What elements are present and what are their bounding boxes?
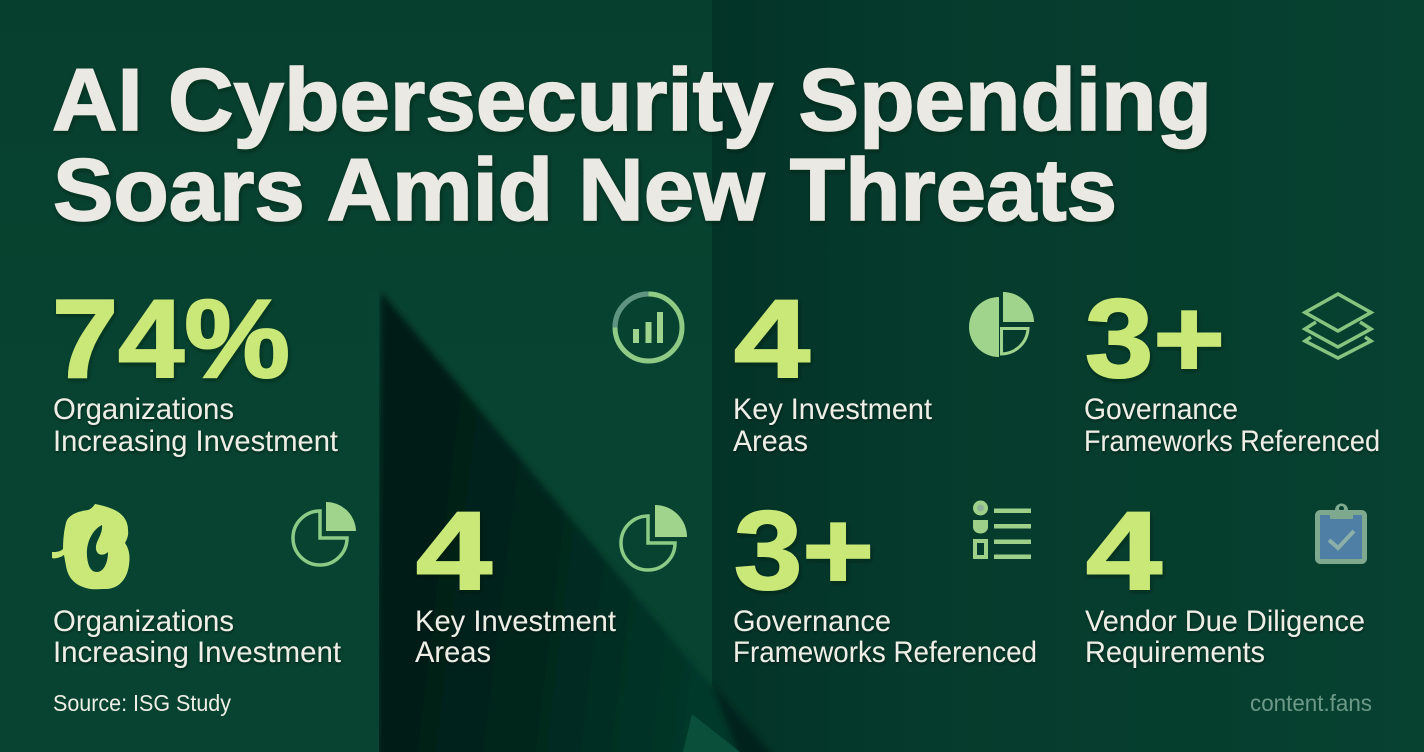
stat: 4 key investment areas: Areas (733, 425, 808, 458)
stat: 3+ governance frameworks referenced: Frameworks Referenced (1084, 425, 1380, 458)
source note: Source: ISG Study (53, 690, 231, 716)
stat: 74% organizations increasing investment (52, 277, 339, 458)
icon: checklist (973, 500, 1031, 559)
stat: 4 key investment areas, row two: Areas (415, 636, 491, 669)
title: Soars Amid New Threats (53, 140, 1117, 239)
stat: 4 vendor due diligence requirements: Vendor Due Diligence (1085, 605, 1365, 638)
stat: 4 key investment areas, row two (415, 489, 617, 669)
stat: garbled figure organizations increasing investment (52, 504, 342, 669)
watermark: content.fans (1250, 690, 1372, 716)
stat: 74% organizations increasing investment: Increasing Investment (53, 425, 339, 458)
stat: garbled figure organizations increasing investment: Organizations (53, 605, 234, 638)
icon: clipboard with check (1318, 504, 1364, 562)
stat: 3+ governance frameworks referenced, row two: 3+ (734, 489, 874, 613)
icon: stacked layers (1305, 294, 1371, 358)
stat: 3+ governance frameworks referenced: 3+ (1085, 277, 1225, 401)
stat: 4 key investment areas: 4 (734, 277, 810, 401)
stat: 4 key investment areas, row two: 4 (416, 489, 492, 613)
icon: pie chart outline 2 (621, 505, 687, 570)
stat: 3+ governance frameworks referenced, row two: Governance (733, 605, 891, 638)
icon: garbled numeral blob (52, 504, 130, 589)
stat: 4 key investment areas: Key Investment (733, 393, 933, 426)
stat: 4 vendor due diligence requirements: Requirements (1085, 636, 1265, 669)
icon: bar chart in ring (615, 294, 682, 361)
title (52, 50, 1212, 239)
stat: 3+ governance frameworks referenced: Governance (1084, 393, 1238, 426)
stat: 3+ governance frameworks referenced, row two: Frameworks Referenced (733, 636, 1037, 669)
stat: 3+ governance frameworks referenced, row two (733, 489, 1037, 669)
stat: 4 vendor due diligence requirements (1085, 489, 1365, 669)
icon: pie chart outline 1 (293, 502, 356, 565)
stat: 4 vendor due diligence requirements: 4 (1086, 489, 1162, 613)
stat: 3+ governance frameworks referenced (1084, 277, 1380, 458)
stat: 4 key investment areas (733, 277, 933, 458)
stat: 74% organizations increasing investment: Organizations (53, 393, 234, 426)
title: AI Cybersecurity Spending (52, 50, 1212, 149)
stat: garbled figure organizations increasing investment: Increasing Investment (53, 636, 342, 669)
stat: 74% organizations increasing investment: 74% (52, 277, 290, 401)
icon: pie chart solid (969, 292, 1034, 357)
stat: 4 key investment areas, row two: Key Investment (415, 605, 617, 638)
